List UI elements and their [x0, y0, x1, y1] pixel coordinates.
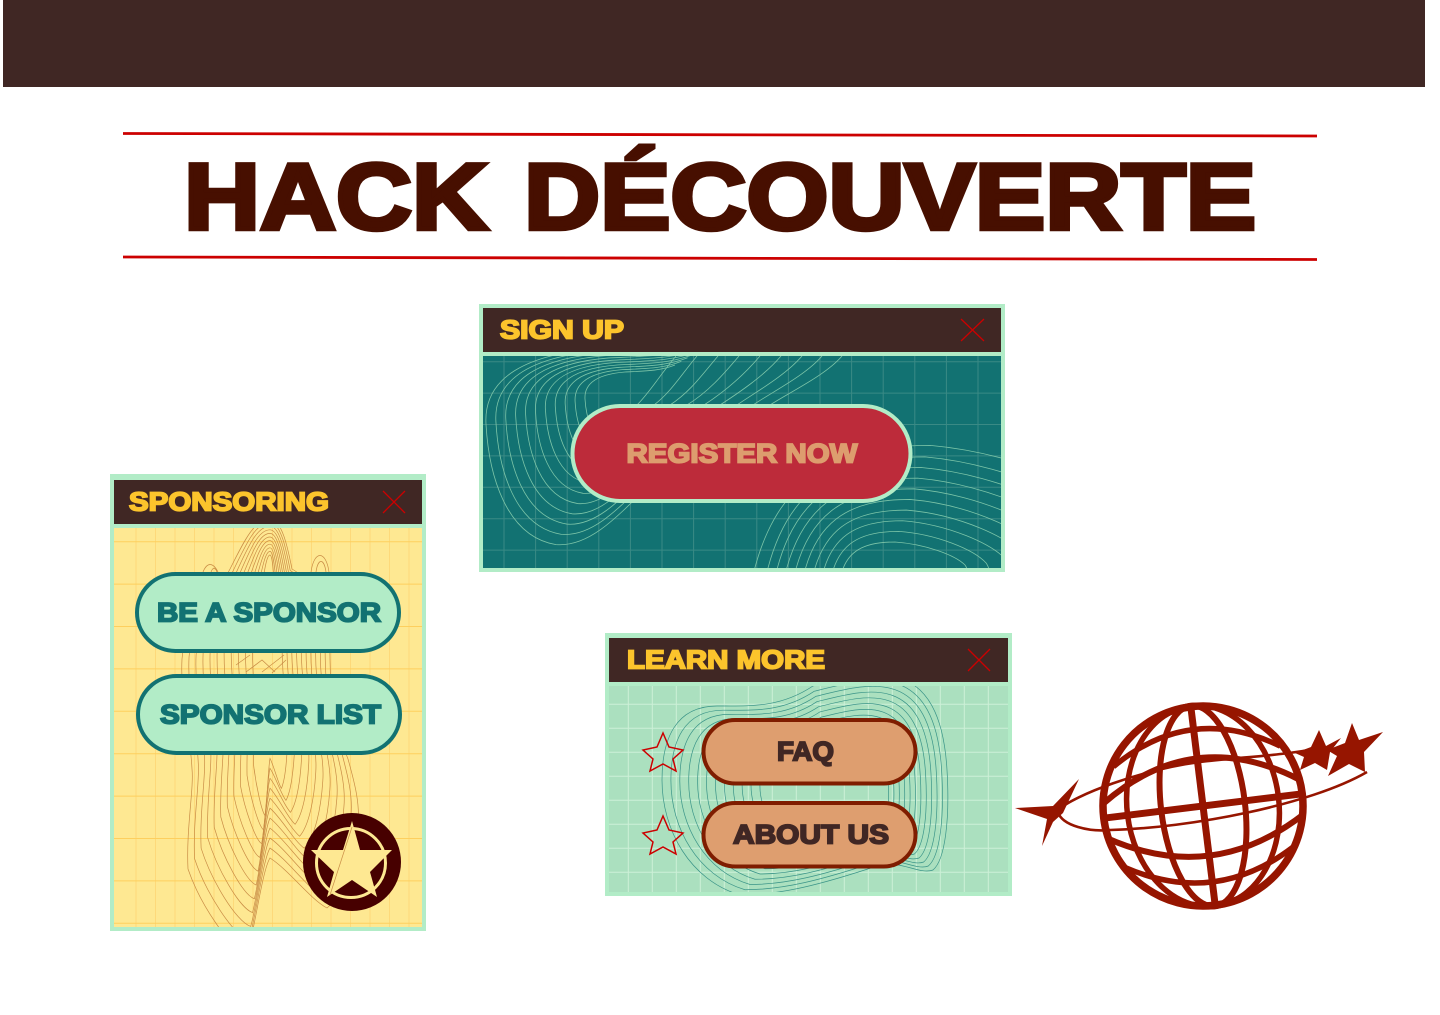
button: sponsor list: [138, 676, 400, 753]
panel: sign up: [479, 304, 1005, 572]
title text: [184, 144, 1256, 249]
button: register now: [572, 406, 910, 501]
icon: close cross: [383, 491, 405, 513]
icon: close cross: [961, 319, 984, 341]
learn more heading: LEARN MORE: [627, 644, 825, 674]
button: be a sponsor: BE A SPONSOR: [157, 598, 381, 628]
sign up body background: [483, 356, 1001, 568]
button: be a sponsor: [137, 574, 399, 651]
learn more grid: [609, 686, 1008, 892]
button: sponsor list: SPONSOR LIST: [160, 700, 382, 730]
icon: outline star 1: [643, 733, 683, 771]
button: about us: [704, 803, 916, 866]
orbit ring: [1058, 748, 1367, 830]
globe grid: [1091, 693, 1315, 919]
title top rule: [123, 134, 1317, 136]
orbit large star: [1327, 723, 1383, 776]
sign up grid: [483, 356, 1001, 568]
title bottom rule: [123, 257, 1317, 260]
button: register now: REGISTER NOW: [626, 438, 858, 468]
sign up header bar: [483, 308, 1001, 352]
button: faq: [704, 720, 916, 784]
title text: HACK: [184, 144, 488, 249]
icon: close cross: [968, 649, 990, 671]
sponsoring contour lines: [182, 519, 358, 954]
icon: outline star 2: [643, 816, 683, 854]
title text: DÉCOUVERTE: [524, 144, 1256, 249]
icon: star badge: [303, 813, 401, 911]
learn more body background: [609, 686, 1008, 892]
panel: learn more: [605, 633, 1012, 896]
sponsoring heading: SPONSORING: [129, 486, 329, 516]
sign up contour lines: [486, 356, 1001, 568]
sign up heading: SIGN UP: [500, 314, 624, 344]
learn more contour lines: [662, 675, 948, 895]
icon: globe with orbit and stars: [1015, 693, 1383, 919]
button: faq: FAQ: [777, 736, 834, 766]
button: about us: ABOUT US: [733, 820, 889, 850]
sponsoring body background: [114, 528, 422, 927]
orbit left star: [1015, 779, 1079, 846]
learn more header bar: [609, 638, 1008, 682]
top banner: [3, 0, 1425, 87]
sponsoring header bar: [114, 480, 422, 524]
title block: [123, 134, 1317, 260]
orbit small star: [1295, 730, 1341, 770]
sponsoring grid: [114, 528, 422, 927]
panel: sponsoring: [110, 474, 426, 954]
